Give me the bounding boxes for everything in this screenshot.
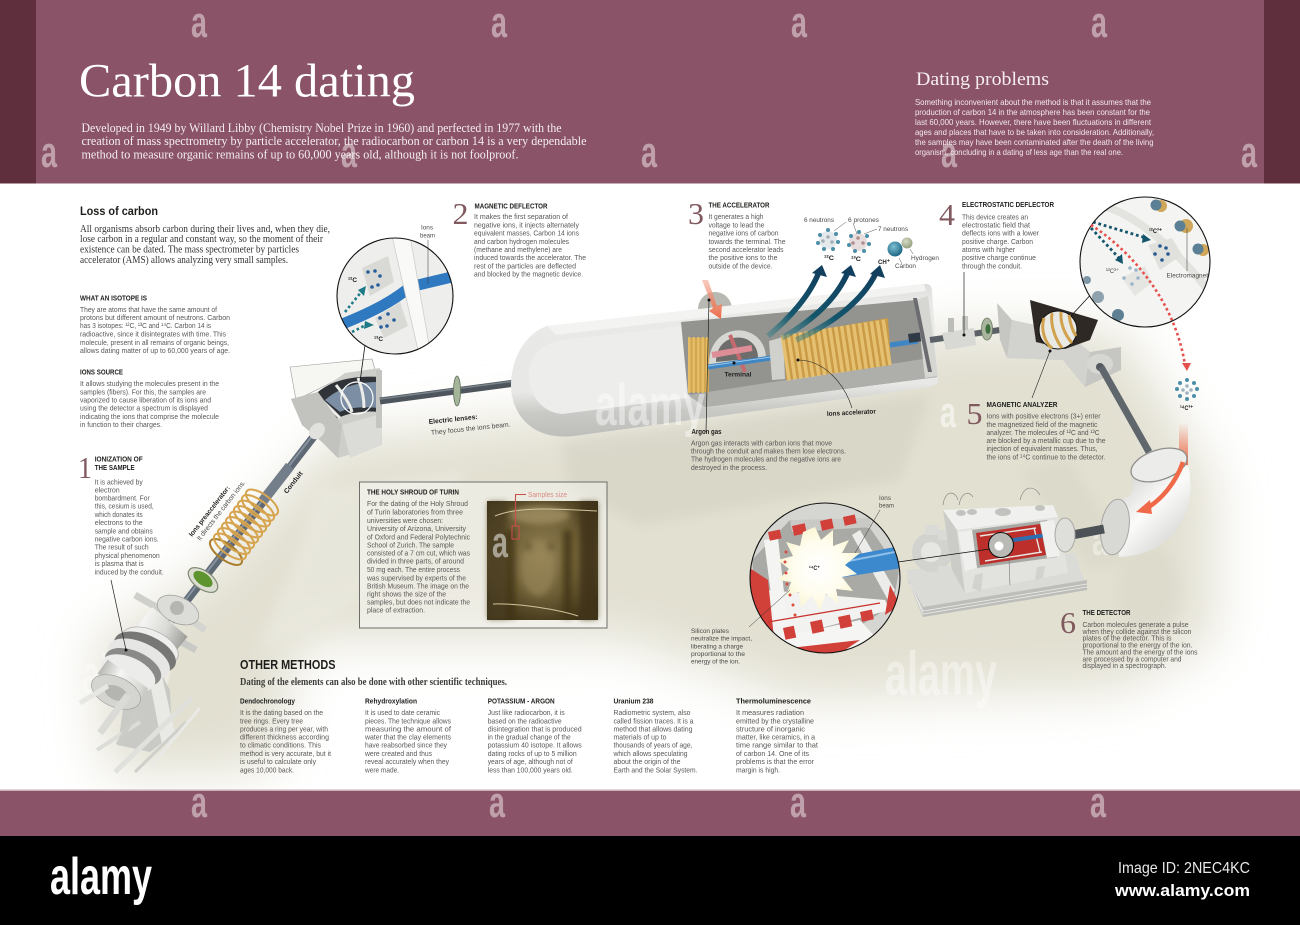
label: ions beam: Ions (421, 224, 434, 232)
intro paragraph: Developed in 1949 by Willard Libby (Chemistry Nobel Prize in 1960) and perfected in 1977 with the (82, 120, 562, 135)
watermark letters: header: a (941, 128, 957, 177)
method: uranium 238: called fission traces. It is a (614, 716, 694, 725)
ions preaccelerator coil (206, 485, 282, 570)
panel: holy shroud of Turin: consisted of a 7 cm cut, which was (367, 549, 470, 558)
method: dendrochronology: is useful to calculate only (240, 757, 316, 766)
label: electric lenses: They focus the ions beam. (431, 421, 511, 437)
text: argon gas: The hydrogen molecules and the negative ions are (691, 455, 841, 464)
method: dendrochronology: method is very accurate, but it (240, 749, 332, 758)
step 5: magnetic analyzer: the ions of ¹⁴C continue to the detector. (986, 452, 1106, 461)
faint watermark words in the scene: alamy (885, 640, 997, 709)
text: what an isotope is: allows dating matter of up to 60,000 years of age. (80, 346, 230, 355)
molecule: carbon 14 ion: ¹⁴C³⁺ (1180, 405, 1193, 412)
label: conduit: Conduit (283, 470, 305, 495)
label: silicon plates: Silicon plates (691, 628, 730, 635)
step 2: magnetic deflector: and carbon hydrogen molecules (474, 237, 569, 246)
label: ions beam (420, 224, 435, 240)
step 4: electrostatic deflector: positive charge. Carbon (962, 237, 1033, 246)
step 1: ionization of the sample: IONIZATION OF (95, 455, 143, 464)
magnetic analyzer (997, 290, 1121, 398)
watermark letters: header: a (341, 128, 357, 177)
text: ions source: vaporized to cause liberation of its ions and (80, 396, 211, 404)
method: uranium 238: about the origin of the (614, 757, 680, 766)
faint watermark words in the scene: alamy (82, 643, 172, 708)
text: argon gas: through the conduit and makes them lose electrons. (691, 447, 846, 456)
step 1: ionization of the sample: sample and obtains (95, 526, 153, 535)
text: loss of carbon: All organisms absorb carbon during their lives and, when they die, (80, 224, 330, 235)
bottom band: a (1090, 778, 1106, 827)
step 1: ionization of the sample: 1 (78, 450, 92, 485)
panel: holy shroud of Turin: 50 mg each. The entire process (367, 565, 460, 574)
alamy logo: alamy (50, 848, 152, 906)
faint watermark words in the scene: a (1092, 516, 1108, 565)
step 3: the accelerator: voltage to lead the (708, 220, 764, 230)
label: ions preaccelerator: It directs the carbon ions. (196, 480, 247, 542)
method: potassium-argon: in the gradual change of the (488, 733, 571, 742)
elbow pipe (1097, 442, 1191, 557)
watermark letters: header: a (1241, 128, 1257, 177)
bottom band: a (790, 778, 806, 827)
step 4: electrostatic deflector: through the conduit. (962, 262, 1022, 270)
step 1: ionization of the sample: this, cesium is used, (95, 502, 154, 511)
ion source assembly (80, 580, 205, 745)
intro: other methods: Dating of the elements can also be done with other scientific techniques. (240, 677, 507, 688)
step 1: ionization of the sample: is plasma that is (95, 559, 144, 568)
magnifier: electromagnets: ¹²C³⁺ (1149, 228, 1162, 235)
text: ions source: in function to their charges. (80, 420, 162, 429)
method: rehydroxylation (364, 696, 452, 774)
method: uranium 238: thousands of years of age, (614, 741, 692, 750)
faint watermark words in the scene (82, 388, 1108, 709)
step 5: magnetic analyzer: injection of equivalent masses. Thus, (986, 444, 1098, 453)
step 4: electrostatic deflector: electrostatic field that (962, 220, 1031, 230)
method: potassium-argon: dating rocks of up to 5 million (488, 749, 577, 758)
deflector housing (290, 359, 382, 458)
panel: holy shroud of Turin: University of Arizona, University (367, 524, 466, 533)
method: dendrochronology: ages 10,000 back. (240, 765, 294, 774)
beige floor haze behind the machine (95, 330, 1215, 775)
label: ions preaccelerator: Ions preaccelerator: (188, 485, 232, 538)
method: rehydroxylation: It is used to date ceramic (365, 708, 440, 717)
method: potassium-argon: years of age, although not of (488, 757, 573, 766)
text: argon gas (691, 427, 846, 472)
method: rehydroxylation: have reabsorbed since they (365, 741, 447, 750)
label: electric lenses (428, 411, 511, 437)
method: thermoluminescence: matter, like ceramics, in a (736, 733, 816, 742)
step 5: magnetic analyzer: MAGNETIC ANALYZER (986, 400, 1058, 409)
text: dating problems: organism, concluding in a dating of less age than the real one. (915, 147, 1123, 157)
samples size marker (512, 490, 567, 539)
step 4: electrostatic deflector: ELECTROSTATIC DEFLECTOR (962, 200, 1055, 209)
text: what an isotope is: molecule, present in all remains of organic beings, (80, 338, 229, 347)
electromagnets (1083, 200, 1209, 321)
panel: holy shroud of Turin: samples, but does not indicate the (367, 598, 470, 607)
method: thermoluminescence: of carbon 14. One of its (736, 749, 809, 758)
shroud photograph (487, 501, 598, 620)
panel: holy shroud of Turin: For the dating of the Holy Shroud (367, 499, 468, 508)
panel: holy shroud of Turin: right shows the size of the (367, 589, 446, 598)
step 2: magnetic deflector: MAGNETIC DEFLECTOR (474, 202, 548, 211)
step 6: the detector: displayed in a spectrograph. (1082, 661, 1166, 670)
method: rehydroxylation: pieces. The technique allows (365, 716, 451, 725)
step 6: the detector: are processed by a computer and (1082, 654, 1182, 663)
method: rehydroxylation: were made. (364, 765, 399, 774)
bottom detector plate (375, 302, 408, 338)
step 1: ionization of the sample: electron (95, 485, 120, 494)
panel: holy shroud of Turin: universities were chosen: (367, 516, 443, 525)
exit beam (890, 341, 918, 345)
method: rehydroxylation: were created and thus (364, 749, 432, 758)
step 3: the accelerator: towards the terminal. The (708, 237, 786, 246)
step 1: ionization of the sample (78, 450, 164, 576)
magnifier: magnetic deflector: ¹³C (374, 336, 383, 343)
step 3: the accelerator: THE ACCELERATOR (708, 200, 770, 210)
step 3: the accelerator: second accelerator leads (708, 245, 784, 254)
method: potassium-argon: based on the radioactive (488, 716, 562, 725)
text: loss of carbon: lose carbon in a regular and constant way, so the moment of their (80, 234, 323, 245)
magnifier: electromagnets (1080, 197, 1210, 371)
red dotted ion path (1091, 225, 1185, 365)
panel: holy shroud of Turin (360, 482, 607, 628)
method: uranium 238: method that allows dating (614, 724, 692, 733)
molecules of carbon isotopes (804, 217, 939, 270)
intro paragraph (82, 120, 587, 162)
step 1: ionization of the sample: induced by the conduit. (95, 567, 164, 576)
step 5: magnetic analyzer: the magnetized field of the magnetic (986, 420, 1098, 429)
blue ion beam (842, 547, 899, 578)
watermark letters: header: a (41, 128, 57, 177)
step 2: magnetic deflector: 2 (452, 196, 468, 231)
side connectors (135, 595, 205, 650)
text: what an isotope is: radioactive, since it disintegrates with time. This (80, 330, 226, 339)
method: uranium 238: which allows speculating (613, 749, 688, 758)
method: potassium-argon: POTASSIUM - ARGON (488, 696, 555, 706)
molecule labels: 6 protones (848, 217, 880, 224)
step 1: ionization of the sample: electrons to the (95, 518, 143, 527)
text: ions source: indicating the ions that comprise the molecule (80, 412, 219, 421)
text: dating problems: ages and places that have to be taken into consideration. Additionally, (915, 127, 1154, 137)
text: what an isotope is: protons but different amount of neutrons. Carbon (80, 313, 230, 322)
method: potassium-argon: Just like radiocarbon, it is (488, 708, 565, 717)
step 2: magnetic deflector: (methane and methylene) are (474, 245, 562, 254)
label: silicon plates: proportional to the (691, 651, 745, 658)
text: loss of carbon (80, 204, 330, 266)
label: silicon plates: liberating a charge (691, 643, 743, 650)
watermark in capsule: alamy (595, 373, 705, 438)
accelerator capsule (511, 284, 938, 438)
label: silicon plates: neutralize the impact, (691, 636, 752, 643)
website: www.alamy.com (1114, 881, 1250, 900)
text: loss of carbon: existence can be dated. The mass spectrometer by particles (80, 244, 299, 256)
step 1: ionization of the sample: bombardment. For (95, 494, 150, 503)
step 2: magnetic deflector: induced towards the accelerator. The (474, 253, 586, 262)
label: electric lenses: Electric lenses: (428, 414, 478, 426)
method: potassium-argon: less than 100,000 years old. (488, 765, 573, 774)
method: thermoluminescence: Thermoluminescence (736, 696, 811, 706)
magnifier: electromagnets: ¹³C³⁺ (1106, 268, 1119, 275)
footer bar (0, 836, 1300, 925)
step 6: the detector: Carbon molecules generate a pulse (1082, 620, 1188, 629)
detector right collar (1055, 518, 1075, 552)
step 6: the detector: plates of the detector. This is (1082, 634, 1172, 643)
method: uranium 238: Earth and the Solar System. (614, 765, 698, 774)
method: thermoluminescence: emitted by the crystalline (736, 716, 814, 725)
step 6: the detector: 6 (1060, 605, 1076, 640)
magnifier: magnetic deflector: ¹²C (348, 277, 357, 284)
shroud photograph: a (492, 518, 508, 567)
watermark letters: header (41, 0, 1257, 177)
green ring lens on conduit (184, 563, 222, 597)
text: what an isotope is: They are atoms that have the same amount of (80, 305, 218, 314)
panel: holy shroud of Turin: School of Zurich. The sample (367, 540, 454, 549)
step 1: ionization of the sample: physical phenomenon (95, 551, 160, 560)
label: electromagnet: Electromagnet (1166, 273, 1208, 280)
orange beam trace (1179, 423, 1188, 465)
molecule: CH: CH⁺ (878, 259, 890, 266)
step 6: the detector: THE DETECTOR (1082, 608, 1131, 617)
conduit to the elbow (1101, 367, 1149, 452)
molecule labels: Carbon (895, 263, 916, 270)
step 2: magnetic deflector: equivalent masses. Carbon 14 ions (474, 228, 579, 238)
text: dating problems: the samples may have been contaminated after the death of the living (915, 137, 1154, 147)
molecule: 12C: ¹²C (824, 255, 834, 262)
step 3: the accelerator: It generates a high (708, 212, 764, 221)
step 2: magnetic deflector: negative ions, it injects alternately (474, 220, 579, 230)
bottom band: a (191, 778, 207, 827)
label: terminal: Terminal (724, 372, 752, 379)
step 3: the accelerator: the positive ions to the (708, 253, 778, 262)
method: uranium 238: Uranium 238 (614, 696, 654, 706)
method: rehydroxylation: reveal accurately when they (365, 757, 449, 766)
text: what an isotope is: WHAT AN ISOTOPE IS (80, 294, 147, 302)
method: dendrochronology: produces a ring per year, with (240, 724, 328, 733)
bottom band (0, 778, 1300, 836)
step 4: electrostatic deflector (939, 197, 1055, 270)
method: uranium 238: materials of up to (614, 733, 666, 742)
molecule labels: Hydrogen (911, 255, 939, 262)
panel: holy shroud of Turin: of Turin laboratories from three (367, 508, 463, 517)
text: ions source: IONS SOURCE (80, 368, 123, 377)
label: ions beam: beam (420, 232, 435, 240)
conduit to the accelerator with electric lens (380, 376, 515, 406)
step 6: the detector (1060, 605, 1198, 670)
step 2: magnetic deflector: and blocked by the magnetic device. (474, 270, 583, 278)
panel: holy shroud of Turin: British Museum. The image on the (367, 581, 469, 590)
method: dendrochronology: to climatic conditions. This (240, 741, 321, 750)
method: dendrochronology (240, 696, 332, 774)
cutaway interior (681, 300, 937, 407)
step 1: ionization of the sample: It is achieved by (95, 477, 143, 486)
molecule: 13C: ¹³C (851, 256, 861, 263)
molecule labels: 7 neutrons (878, 226, 909, 233)
magnifier: detector interior: ¹⁴C⁺ (809, 565, 820, 572)
top detector plate (362, 256, 394, 296)
text: argon gas: Argon gas (692, 427, 722, 436)
conduit to the detector (1072, 529, 1104, 535)
method: dendrochronology: tree rings. Every tree (240, 716, 303, 725)
step 3: the accelerator: negative ions of carbon (708, 228, 778, 238)
floor reflections (260, 395, 1182, 650)
detector (907, 488, 1087, 617)
ion beam (340, 287, 410, 325)
method: thermoluminescence: margin is high. (736, 765, 780, 774)
method: thermoluminescence: structure of inorganic (736, 724, 805, 733)
heading: other methods: OTHER METHODS (240, 657, 336, 672)
lens circle on deflector (341, 382, 373, 414)
method: potassium-argon: disintegration that is produced (488, 724, 582, 733)
step 1: ionization of the sample: which donates its (94, 510, 143, 519)
text: ions source (80, 368, 219, 429)
text: dating problems (915, 97, 1154, 157)
header band (0, 0, 1300, 184)
method: rehydroxylation: measuring the amount of (365, 724, 452, 733)
step 1: ionization of the sample: The result of such (95, 543, 149, 552)
step 2: magnetic deflector: rest of the particles are deflected (474, 262, 576, 270)
panel: holy shroud of Turin: divided in three parts, of around (367, 557, 464, 566)
bottom band: a (489, 778, 505, 827)
heading: dating problems: Dating problems (916, 69, 1049, 90)
method: thermoluminescence: problems is that the error (736, 757, 814, 766)
left coil (689, 338, 709, 392)
method: dendrochronology: different thickness according (240, 733, 329, 742)
label: silicon plates: energy of the ion. (691, 659, 740, 666)
step 4: electrostatic deflector: deflects ions with a lower (962, 228, 1039, 238)
detector left gear (912, 532, 952, 572)
molecule: carbon 14 ion (1175, 378, 1199, 412)
method: thermoluminescence (736, 696, 819, 774)
text: dating problems: production of carbon 14 in the atmosphere has been constant for the (915, 107, 1150, 117)
title: Carbon 14 dating (79, 54, 415, 108)
method: potassium-argon: potassium 40 isotope. It allows (488, 741, 582, 750)
step 4: electrostatic deflector: This device creates an (962, 212, 1028, 222)
right coil (769, 337, 785, 380)
step 5: magnetic analyzer: are blocked by a metallic cup due to the (986, 436, 1106, 445)
panel: holy shroud of Turin: THE HOLY SHROUD OF TURIN (367, 488, 459, 497)
terminal (708, 330, 778, 379)
text: argon gas: destroyed in the process. (691, 463, 767, 472)
step 4: electrostatic deflector: 4 (939, 197, 956, 232)
step 4: electrostatic deflector: atoms with higher (962, 245, 1015, 254)
step 5: magnetic analyzer (966, 396, 1106, 461)
teal ion arrows (768, 265, 885, 340)
step 1: ionization of the sample: THE SAMPLE (95, 463, 135, 472)
argon gas dome (698, 292, 732, 326)
method: uranium 238: Radiometric system, also (614, 708, 690, 717)
text: ions source: samples (fibers). For this, the samples are (80, 388, 206, 396)
label: ions beam at detector (879, 495, 894, 510)
text: dating problems: last 60,000 years. However, there have been fluctuations in different (915, 117, 1152, 127)
magnifier: detector interior (745, 503, 990, 660)
step 5: magnetic analyzer: analyzer. The molecules of ¹²C and ¹³C (986, 428, 1100, 437)
method: thermoluminescence: time range similar to that (736, 741, 819, 750)
text: ions source: using the detector a spectrum is displayed (80, 404, 208, 413)
image id: Image ID: 2NEC4KC (1118, 860, 1250, 877)
step 6: the detector: The amount and the energy of the ions (1082, 647, 1198, 656)
text: what an isotope is: has 3 isotopes: ¹²C, ¹³C and ¹⁴C. Carbon 14 is (80, 321, 211, 330)
text: loss of carbon: accelerator (AMS) allows analyzing very small samples. (80, 255, 288, 266)
pointer: ions accelerator (796, 358, 852, 408)
label: ions beam at detector: beam (879, 502, 894, 510)
label: silicon plates (691, 628, 752, 666)
faint watermark words in the scene: a (940, 388, 956, 437)
panel: holy shroud of Turin: place of extraction. (367, 606, 425, 615)
method: rehydroxylation: water that the clay elements (364, 733, 451, 742)
method: dendrochronology: Dendochronology (240, 696, 296, 706)
label: ions accelerator: Ions accelerator (827, 408, 876, 418)
panel: holy shroud of Turin: was supervised by experts of the (366, 573, 466, 582)
electrostatic deflector fitting (930, 272, 1000, 350)
detector box (943, 505, 1058, 530)
step 6: the detector: when they collide against the silicon (1082, 627, 1192, 636)
intro paragraph: method to measure organic remains of up to 60,000 years old, although it is not foolproof. (82, 146, 518, 162)
method: thermoluminescence: It measures radiation (736, 708, 804, 717)
step 6: the detector: proportional to the energy of the ion. (1082, 641, 1192, 650)
carbon plates (1148, 238, 1182, 270)
step 5: magnetic analyzer: Ions with positive electrons (3+) enter (986, 412, 1101, 421)
text: ions source: It allows studying the molecules present in the (80, 379, 219, 388)
detector base (907, 553, 1087, 617)
section: other methods (240, 657, 819, 774)
text: loss of carbon: Loss of carbon (80, 204, 158, 218)
impact starburst (778, 527, 860, 610)
step 3: the accelerator: outside of the device. (708, 262, 772, 270)
text: argon gas: Argon gas interacts with carbon ions that move (691, 438, 832, 447)
step 2: magnetic deflector (452, 196, 586, 278)
pointer: ionization (111, 580, 128, 652)
red arrow in elbow (1144, 462, 1183, 510)
step 3: the accelerator: 3 (688, 196, 704, 231)
step 4: electrostatic deflector: positive charge continue (962, 253, 1036, 262)
molecule labels: 6 neutrons (804, 217, 835, 224)
watermark letters: header: a (641, 128, 657, 177)
method: rehydroxylation: Rehydroxylation (365, 696, 417, 706)
conduit from source to deflector (169, 431, 318, 621)
text: what an isotope is (80, 294, 230, 355)
argon gas arrow and pointer (702, 280, 722, 432)
samples size marker: Samples size (528, 490, 567, 499)
stand of ion source (97, 672, 200, 772)
method: dendrochronology: It is the dating based on the (240, 708, 323, 717)
method: potassium-argon (488, 696, 582, 774)
method: uranium 238 (613, 696, 698, 774)
text: dating problems: Something inconvenient about the method is that it assumes that the (915, 97, 1151, 107)
step 3: the accelerator (688, 196, 786, 270)
panel: holy shroud of Turin: of Oxford and Federal Polytechnic (367, 532, 470, 541)
step 1: ionization of the sample: negative carbon ions. (95, 535, 159, 544)
intro paragraph: creation of mass spectrometry by particle accelerator, the radiocarbon or carbon 14 is a very dependable (82, 133, 587, 148)
step 5: magnetic analyzer: 5 (966, 396, 982, 431)
magnifier: magnetic deflector (337, 224, 456, 382)
label: ions beam at detector: Ions (879, 495, 892, 502)
molecule labels (804, 217, 939, 270)
step 2: magnetic deflector: It makes the first separation of (474, 212, 569, 221)
